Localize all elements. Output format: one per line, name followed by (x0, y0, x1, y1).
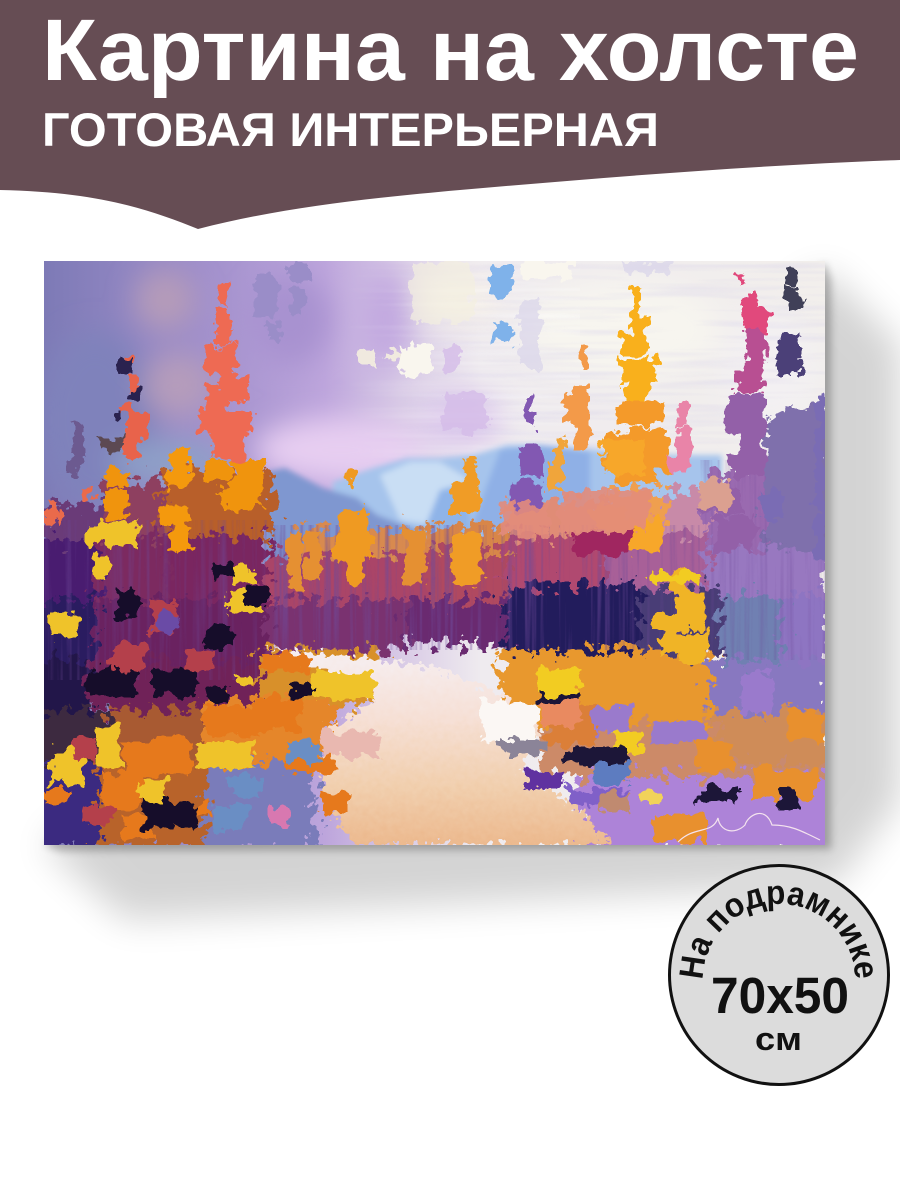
path / river (265, 648, 612, 845)
badge size: 70x50 (711, 967, 849, 1024)
canvas drop shadow (44, 263, 900, 920)
badge unit: см (755, 1021, 802, 1057)
badge curved label: На подрамнике (679, 886, 873, 978)
forest colour mass (30, 420, 836, 855)
painting sky (35, 261, 825, 845)
header banner (0, 0, 900, 229)
sky brush strokes (255, 262, 670, 431)
subtitle: ГОТОВАЯ ИНТЕРЬЕРНАЯ (42, 103, 659, 156)
trees (46, 270, 825, 664)
tree trunk streaks (44, 460, 825, 680)
painting: autumn forest on canvas (30, 261, 836, 855)
badge: size on stretcher (668, 864, 890, 1086)
foreground foliage dabs (44, 522, 823, 842)
mountains (262, 445, 722, 570)
title: Картина на холсте (42, 2, 859, 99)
signature (678, 813, 820, 842)
